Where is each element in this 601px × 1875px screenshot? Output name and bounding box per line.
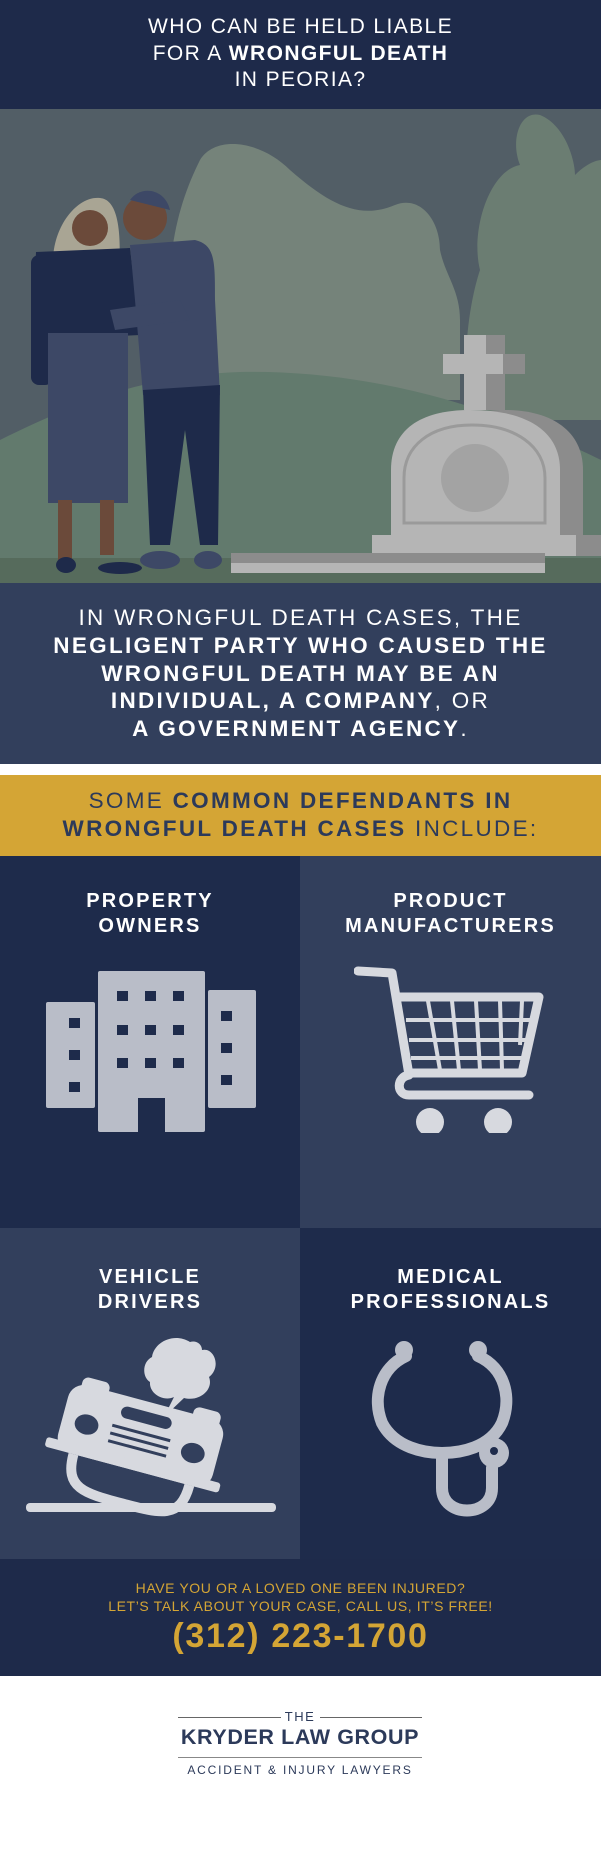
heading text: SOME COMMON DEFENDANTS IN	[89, 788, 512, 813]
label: VEHICLE	[99, 1266, 201, 1288]
tombstone	[231, 335, 601, 573]
panel: intro statement	[0, 583, 601, 764]
heading text: WRONGFUL DEATH CASES INCLUDE:	[63, 816, 538, 840]
label: MEDICAL	[397, 1266, 504, 1288]
icon: shopping cart	[354, 966, 544, 1133]
title: WHO CAN BE HELD LIABLE	[148, 15, 453, 38]
CTA text	[108, 1580, 493, 1614]
label: OWNERS	[98, 914, 202, 936]
label: MANUFACTURERS	[345, 914, 556, 936]
icon: buildings	[46, 971, 256, 1132]
statement text: INDIVIDUAL, A COMPANY, OR	[111, 688, 490, 713]
label	[351, 1266, 550, 1312]
ground hill	[0, 372, 601, 583]
statement text: WRONGFUL DEATH MAY BE AN	[101, 661, 500, 686]
label	[86, 890, 214, 936]
title: FOR A WRONGFUL DEATH	[153, 42, 448, 64]
label	[345, 890, 556, 936]
illustration: grieving couple at grave	[0, 109, 601, 583]
label: PROFESSIONALS	[351, 1290, 550, 1312]
statement text: NEGLIGENT PARTY WHO CAUSED THE	[53, 633, 548, 658]
couple	[31, 191, 222, 574]
label: PRODUCT	[393, 890, 508, 912]
logo	[178, 1709, 422, 1777]
panel: product manufacturers	[300, 856, 601, 1228]
statement text: IN WRONGFUL DEATH CASES, THE	[78, 605, 523, 630]
panel: medical professionals	[300, 1228, 601, 1559]
panel: property owners	[0, 856, 300, 1228]
header	[0, 0, 601, 109]
logo: ACCIDENT & INJURY LAWYERS	[187, 1763, 413, 1777]
icon: stethoscope	[372, 1341, 512, 1516]
panel: call to action	[0, 1559, 601, 1676]
CTA text: HAVE YOU OR A LOVED ONE BEEN INJURED?	[136, 1580, 465, 1596]
label: DRIVERS	[98, 1290, 202, 1312]
label	[98, 1266, 202, 1312]
CTA text: LET’S TALK ABOUT YOUR CASE, CALL US, IT’S FREE!	[108, 1598, 493, 1614]
statement text	[53, 605, 548, 741]
label: PROPERTY	[86, 890, 214, 912]
statement text: A GOVERNMENT AGENCY.	[132, 716, 469, 741]
bushes	[169, 144, 460, 400]
title	[148, 15, 453, 91]
panel: gold heading	[0, 775, 601, 856]
logo: THE	[285, 1709, 315, 1724]
phone number: (312) 223-1700	[172, 1617, 429, 1655]
panel: vehicle drivers	[0, 1228, 300, 1559]
heading text	[62, 788, 538, 840]
title: IN PEORIA?	[235, 68, 366, 91]
icon: overturned car	[26, 1338, 276, 1516]
logo: KRYDER LAW GROUP	[181, 1725, 419, 1749]
